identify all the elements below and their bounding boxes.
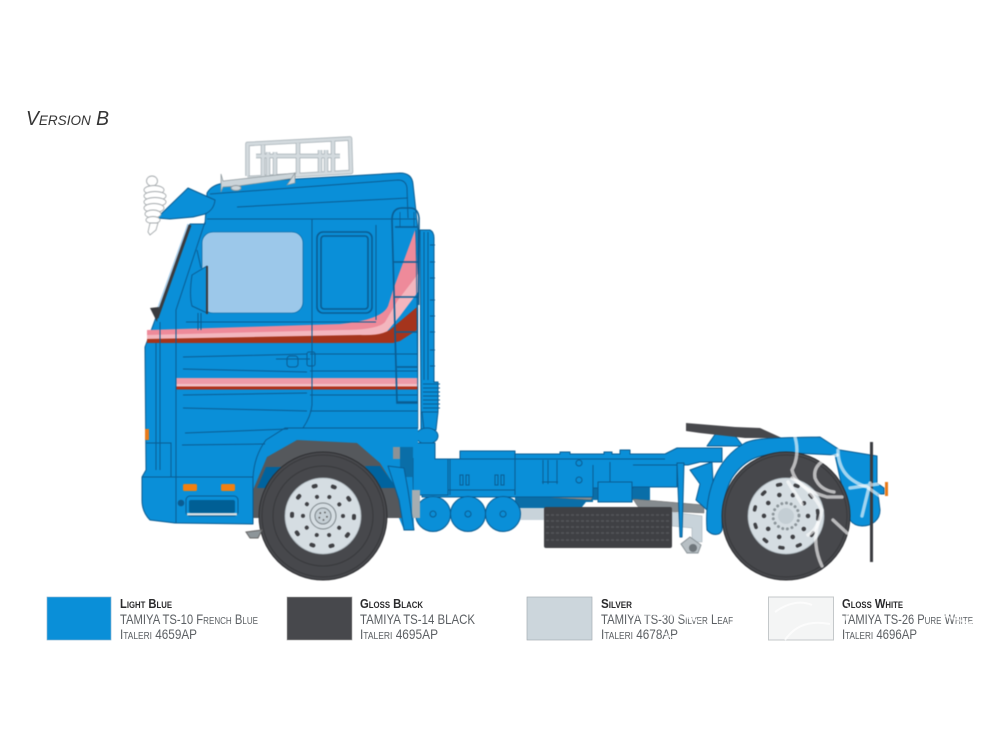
chassis (422, 433, 743, 553)
title: Version B: Version B (26, 108, 109, 130)
roof rack (248, 138, 351, 178)
watermark over legend (632, 602, 972, 640)
legend: silver (527, 596, 733, 642)
wiper (150, 307, 159, 322)
legend: gloss white (768, 596, 973, 642)
rollers (416, 496, 520, 532)
legend: gloss white: Gloss White (842, 596, 903, 611)
front orange marker (145, 429, 149, 440)
air horn (221, 173, 295, 192)
front right mudguard (388, 466, 414, 530)
truck illustration (142, 138, 888, 580)
tow hook (246, 530, 262, 538)
hanging arm (677, 463, 684, 537)
frame rail (422, 448, 722, 497)
grey cylinder (681, 537, 701, 553)
legend: light blue: Italeri 4659AP (120, 626, 197, 642)
Michelin man mascot (144, 176, 166, 235)
rear wheel (722, 452, 850, 580)
fifth wheel plate (686, 423, 782, 438)
side mirror (190, 250, 207, 330)
windshield (157, 225, 190, 318)
watermark (788, 437, 884, 566)
cab body (142, 173, 418, 524)
bumper line (142, 443, 253, 523)
legend: gloss black: TAMIYA TS-14 BLACK (360, 611, 476, 627)
light pink swoosh (147, 274, 418, 340)
white gap behind cab (418, 305, 420, 428)
legend (47, 596, 973, 642)
legend: light blue: TAMIYA TS-10 French Blue (120, 611, 258, 627)
front wheel arch (246, 426, 420, 530)
pink swoosh (147, 230, 418, 338)
legend: silver: Silver (601, 596, 632, 611)
legend: gloss white: Italeri 4696AP (842, 626, 917, 642)
rear orange marker (885, 482, 888, 496)
bumper lights (183, 484, 235, 491)
spare tyre (544, 507, 672, 548)
grey leaf springs and silver parts (515, 482, 704, 542)
exhaust and air intake (413, 230, 448, 495)
legend: gloss black: Italeri 4695AP (360, 626, 438, 642)
lower stripe (176, 378, 418, 390)
legend: silver: TAMIYA TS-30 Silver Leaf (601, 611, 733, 627)
roof mirror arm (157, 188, 215, 219)
legend: light blue: Light Blue (120, 596, 172, 611)
cab panel lines (156, 180, 418, 477)
front wheel (259, 452, 387, 580)
red swoosh (147, 307, 417, 343)
door window (317, 232, 372, 313)
door handle (276, 352, 315, 367)
bumper intake (178, 496, 238, 516)
fifth wheel support (707, 433, 743, 446)
legend: gloss black: Gloss Black (360, 596, 423, 611)
mudflap bar (870, 442, 873, 562)
rear suspension bracket (690, 462, 714, 510)
rear fender (707, 437, 884, 534)
legend: silver: Italeri 4678AP (601, 626, 678, 642)
legend: light blue (47, 596, 258, 642)
ladder (392, 208, 419, 403)
legend: gloss black (287, 596, 476, 642)
side window (202, 232, 303, 313)
